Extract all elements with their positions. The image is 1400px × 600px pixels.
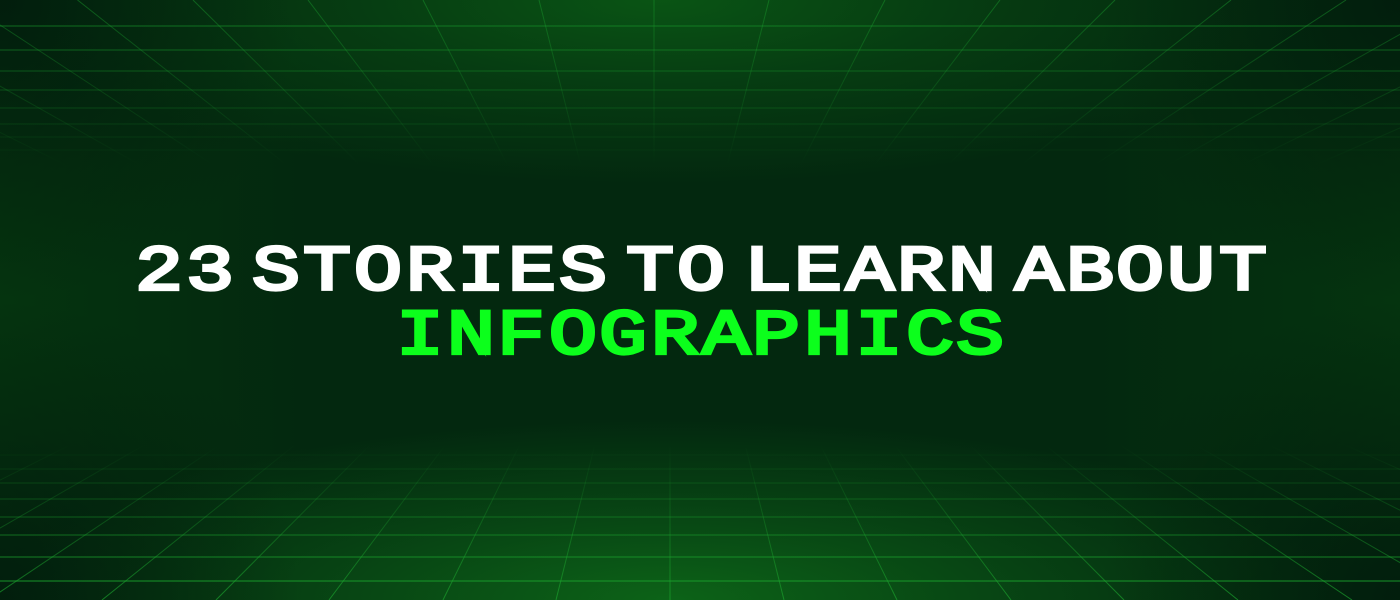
bottom perspective grid	[0, 440, 1400, 600]
title line 2: INFOGRAPHICS	[396, 300, 1004, 373]
top perspective grid	[0, 0, 1400, 170]
title line 1: 23 STORIES TO LEARN ABOUT	[135, 236, 1267, 309]
